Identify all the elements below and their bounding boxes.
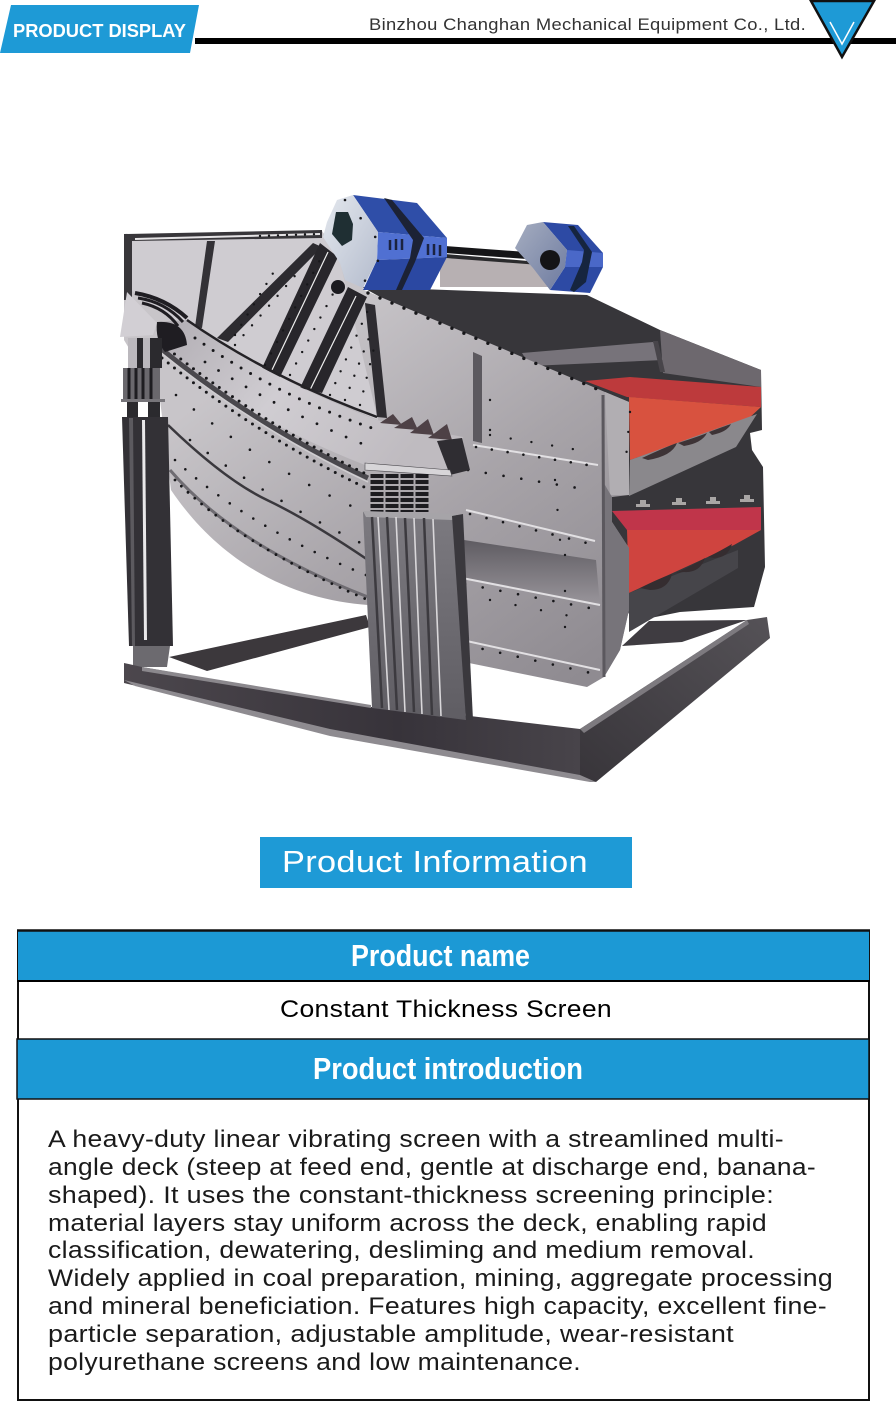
row: product introduction header — [17, 1039, 869, 1099]
band lower rail — [160, 348, 368, 478]
drive shaft — [445, 246, 540, 265]
header rule — [195, 38, 896, 44]
far side upper panel — [660, 330, 761, 387]
bracket strip — [365, 463, 452, 476]
right rear base shadow block — [622, 620, 747, 646]
introduction text block: and mineral beneficiation. Features high capacity, excellent fine- — [48, 1293, 827, 1320]
rear strip behind shaft — [440, 258, 552, 287]
introduction text block: shaped). It uses the constant-thickness screening principle: — [48, 1182, 774, 1209]
lower banana rivet rail — [170, 470, 368, 597]
lower banana plate rail — [168, 425, 368, 560]
right plate rails — [462, 445, 600, 670]
lower right flange — [602, 480, 629, 677]
discharge bracket dark side — [437, 438, 470, 475]
table outline — [18, 931, 869, 1400]
product table — [17, 930, 870, 1400]
section title: Product Information — [260, 837, 632, 888]
introduction text block: particle separation, adjustable amplitude, wear-resistant — [48, 1321, 734, 1348]
product photo: vibrating screen machine — [120, 195, 770, 782]
header badge: PRODUCT DISPLAY: PRODUCT DISPLAY — [13, 21, 186, 41]
feed chute — [120, 292, 187, 352]
rivet pattern — [162, 234, 630, 675]
top edge strip — [124, 230, 322, 300]
company name: Binzhou Changhan Mechanical Equipment Co., Ltd. — [369, 15, 806, 34]
base frame — [124, 617, 770, 782]
introduction text block: angle deck (steep at feed end, gentle at discharge end, banana- — [48, 1154, 816, 1181]
cross tube — [522, 341, 665, 372]
exciter motor: rear — [515, 222, 603, 293]
header badge: PRODUCT DISPLAY — [0, 5, 199, 53]
side plate main — [124, 231, 629, 687]
section title: Product Information: Product Information — [282, 844, 588, 879]
exciter motor: front — [323, 195, 447, 290]
centre spring support column — [363, 511, 473, 720]
band upper edge — [187, 320, 377, 417]
upper deck — [585, 377, 761, 496]
far side body — [362, 287, 765, 622]
row: product introduction header: Product introduction — [313, 1051, 583, 1086]
discharge bracket fins — [380, 414, 452, 440]
introduction text block: polyurethane screens and low maintenance. — [48, 1349, 581, 1376]
left support column — [121, 338, 173, 667]
introduction text block: A heavy-duty linear vibrating screen with a streamlined multi- — [48, 1126, 784, 1153]
curved band plate — [157, 320, 463, 475]
rear base beam — [169, 615, 370, 671]
lower deck — [612, 495, 761, 632]
row: product name value: Constant Thickness Screen — [280, 996, 612, 1023]
diagonal braces — [195, 241, 387, 418]
row: product name header — [17, 930, 870, 981]
vertical plate rib — [473, 352, 482, 443]
upper left plate — [131, 236, 378, 420]
coil springs — [377, 474, 422, 512]
introduction text block — [48, 1126, 833, 1376]
introduction text block: material layers stay uniform across the deck, enabling rapid — [48, 1210, 767, 1237]
right flange — [605, 392, 629, 495]
row: product name header: Product name — [351, 938, 530, 973]
icon: company logo triangle — [811, 1, 874, 57]
lower side plate shadow band — [462, 540, 600, 606]
introduction text block: Widely applied in coal preparation, mining, aggregate processing — [48, 1265, 833, 1292]
introduction text block: classification, dewatering, desliming and medium removal. — [48, 1237, 755, 1264]
